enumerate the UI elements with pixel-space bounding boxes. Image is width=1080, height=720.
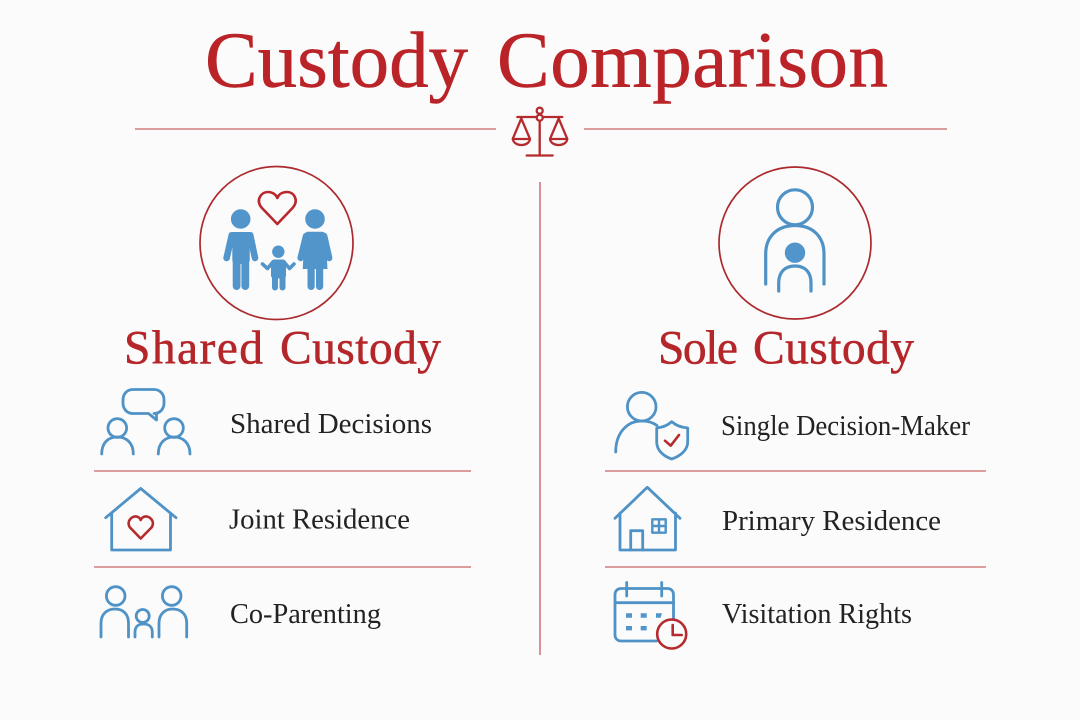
title: Comparison [497, 18, 888, 104]
header divider right [584, 128, 947, 130]
centre divider [539, 182, 541, 655]
text: primary residence: Primary Residence [722, 505, 941, 537]
heading: shared custody: Shared [124, 322, 263, 374]
icon: scales of justice [513, 108, 567, 156]
title: Custody [205, 18, 468, 104]
text: shared decisions: Shared Decisions [230, 408, 432, 440]
icon: person with shield [616, 392, 688, 459]
icon: co-parenting family [101, 587, 187, 637]
icon: people with speech bubble [102, 390, 190, 454]
text: co-parenting: Co-Parenting [230, 598, 381, 630]
row divider [605, 566, 986, 568]
icon: parent and child in circle [719, 167, 871, 319]
heading: sole custody: Sole [658, 322, 738, 374]
text: joint residence: Joint Residence [229, 504, 410, 536]
heading: sole custody: Custody [753, 322, 914, 374]
heading: shared custody: Custody [280, 322, 441, 374]
panel: shared custody [94, 166, 471, 637]
panel: sole custody [605, 167, 986, 648]
icon: calendar with clock [615, 582, 686, 648]
row divider [94, 566, 471, 568]
row divider [94, 470, 471, 472]
icon: house [615, 487, 680, 550]
icon: house with heart [106, 488, 176, 550]
header divider left [135, 128, 496, 130]
icon: family in circle [200, 166, 353, 320]
text: visitation rights: Visitation Rights [722, 598, 912, 630]
row divider [605, 470, 986, 472]
text: single decision-maker: Single Decision-Maker [721, 410, 970, 442]
